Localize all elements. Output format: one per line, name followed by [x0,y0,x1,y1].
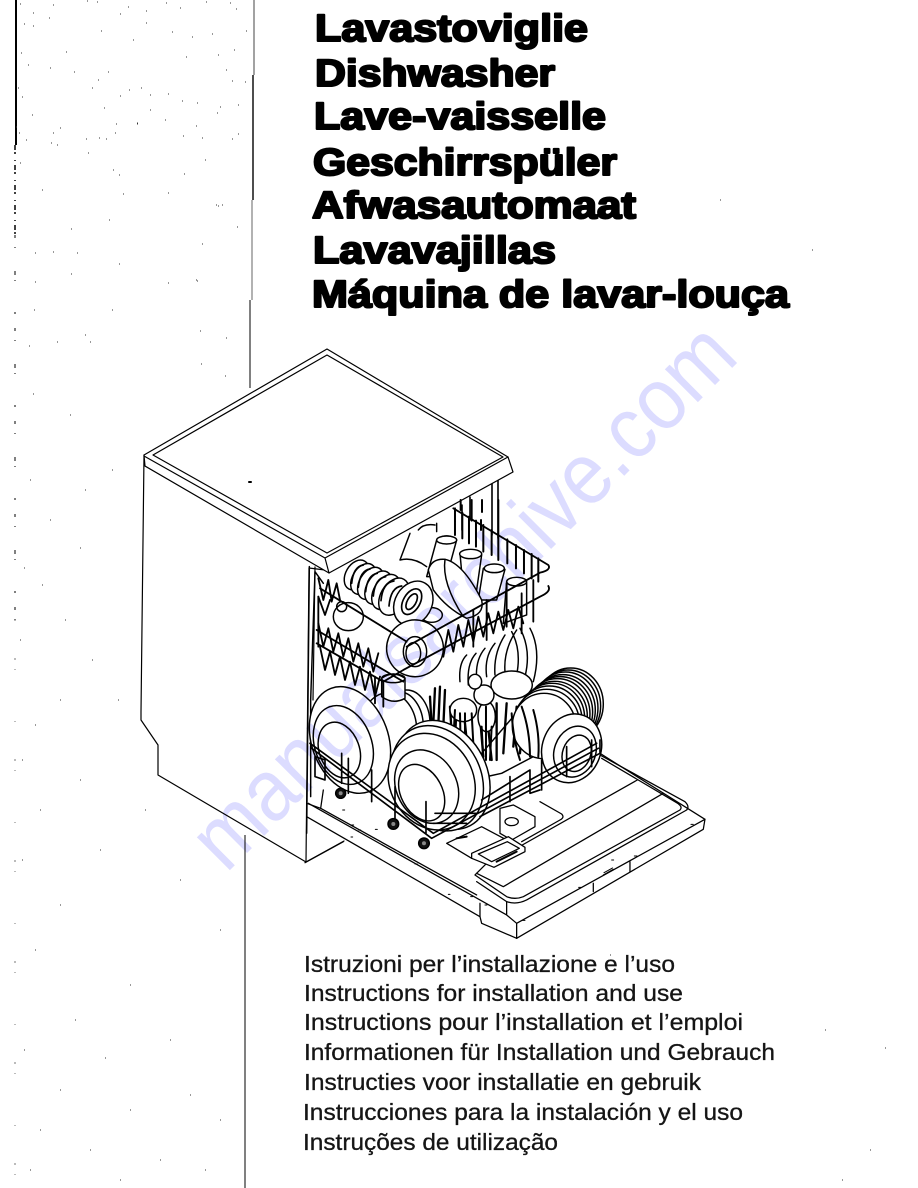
illustration: dishwasher with open door and loaded racks [141,349,705,938]
instructions: Spanish: Instrucciones para la instalación y el uso [303,1099,743,1125]
instructions: Dutch: Instructies voor installatie en gebruik [304,1069,702,1095]
title: English: Dishwasher [315,53,555,95]
right plate stack [512,668,611,791]
instructions: French: Instructions pour l’installation et l’emploi [304,1009,743,1035]
dish load in the interior [295,500,611,849]
instructions: Portuguese: Instruções de utilização [303,1129,558,1155]
title block [312,8,790,316]
front large plate [371,704,508,847]
cabinet body [141,349,513,862]
lower rack wires and wheels [310,740,600,849]
title: Dutch: Afwasautomaat [312,185,636,227]
cabinet side [141,455,325,862]
cutlery basket [430,674,540,777]
door with dispenser, pulled out at the front [305,753,705,938]
watermark: manualsarchive.com [169,303,754,887]
instructions: Italian: Istruzioni per l’installazione e l’uso [304,951,675,977]
title: Spanish: Lavavajillas [313,230,556,272]
title: German: Geschirrspüler [313,142,617,184]
instructions: German: Informationen für Installation und Gebrauch [304,1039,775,1065]
title: Portuguese: Máquina de lavar-louça [312,274,790,316]
lower rack: rear plates behind the upper rack [295,627,542,805]
instructions: English: Instructions for installation and use [304,980,683,1006]
title: French: Lave-vaisselle [314,96,606,138]
cabinet top [144,349,513,573]
instructions block [303,951,775,1155]
upper rack with glasses, cups and plates [317,500,549,707]
title: Italian: Lavastoviglie [315,8,588,50]
